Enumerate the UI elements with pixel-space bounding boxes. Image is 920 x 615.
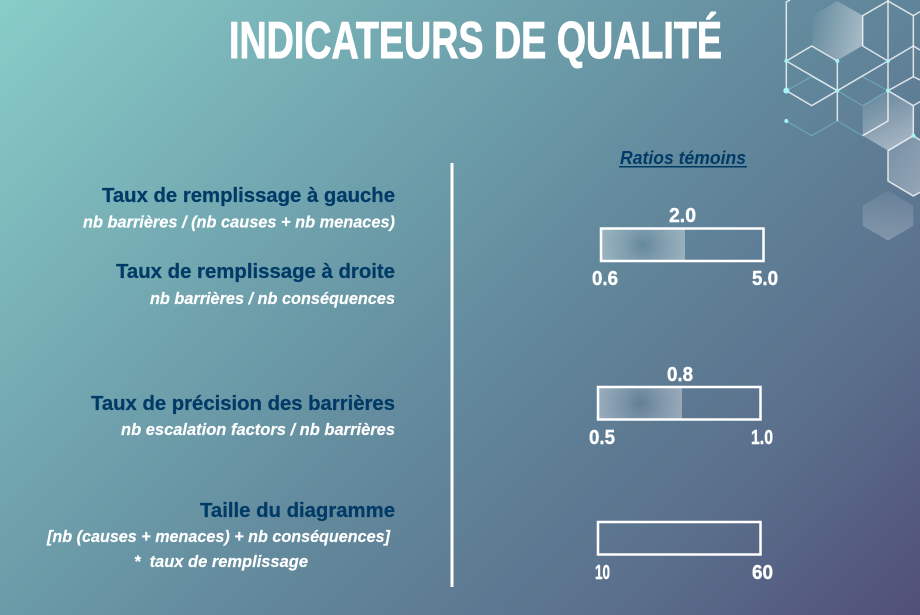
decoration: hexagon network (783, 0, 920, 241)
text block: taux de remplissage à gauche: Taux de remplissage à gauche (102, 185, 395, 207)
gauge: taux de remplissage (592, 205, 778, 290)
text block: taille du diagramme (46, 500, 395, 571)
text block: taux de remplissage à droite (116, 261, 395, 308)
gauge: taux de précision: 0.5 (589, 427, 615, 449)
gauge: taille du diagramme: 10 (595, 562, 610, 584)
gauge: taille du diagramme: 60 (752, 562, 773, 584)
text block: taux de précision des barrières (91, 393, 395, 439)
gauge: taux de précision: 1.0 (751, 427, 773, 449)
text block: taux de remplissage à gauche: nb barrières / (nb causes + nb menaces) (83, 212, 395, 232)
text block: taille du diagramme: [nb (causes + menaces) + nb conséquences] (46, 527, 391, 546)
text block: taille du diagramme: Taille du diagramme (200, 500, 395, 522)
title: INDICATEURS DE QUALITÉ (229, 12, 722, 70)
vertical divider (450, 163, 454, 587)
text block: taux de remplissage à gauche (83, 185, 395, 232)
gauge: taille du diagramme (595, 522, 773, 584)
text block: taux de précision des barrières: Taux de précision des barrières (91, 393, 395, 415)
text block: taille du diagramme: * taux de remplissage (134, 552, 308, 571)
gauge: taux de précision (589, 364, 773, 449)
text block: taux de remplissage à droite: Taux de remplissage à droite (116, 261, 395, 283)
gauge: taux de remplissage: 5.0 (752, 268, 778, 290)
gauge: taux de précision: 0.8 (667, 364, 693, 386)
heading: ratios témoins: Ratios témoins (620, 148, 746, 168)
gauge: taux de remplissage: 0.6 (592, 268, 618, 290)
text block: taux de précision des barrières: nb escalation factors / nb barrières (121, 420, 395, 439)
gauge: taux de remplissage: 2.0 (669, 205, 696, 227)
text block: taux de remplissage à droite: nb barrières / nb conséquences (150, 289, 395, 308)
